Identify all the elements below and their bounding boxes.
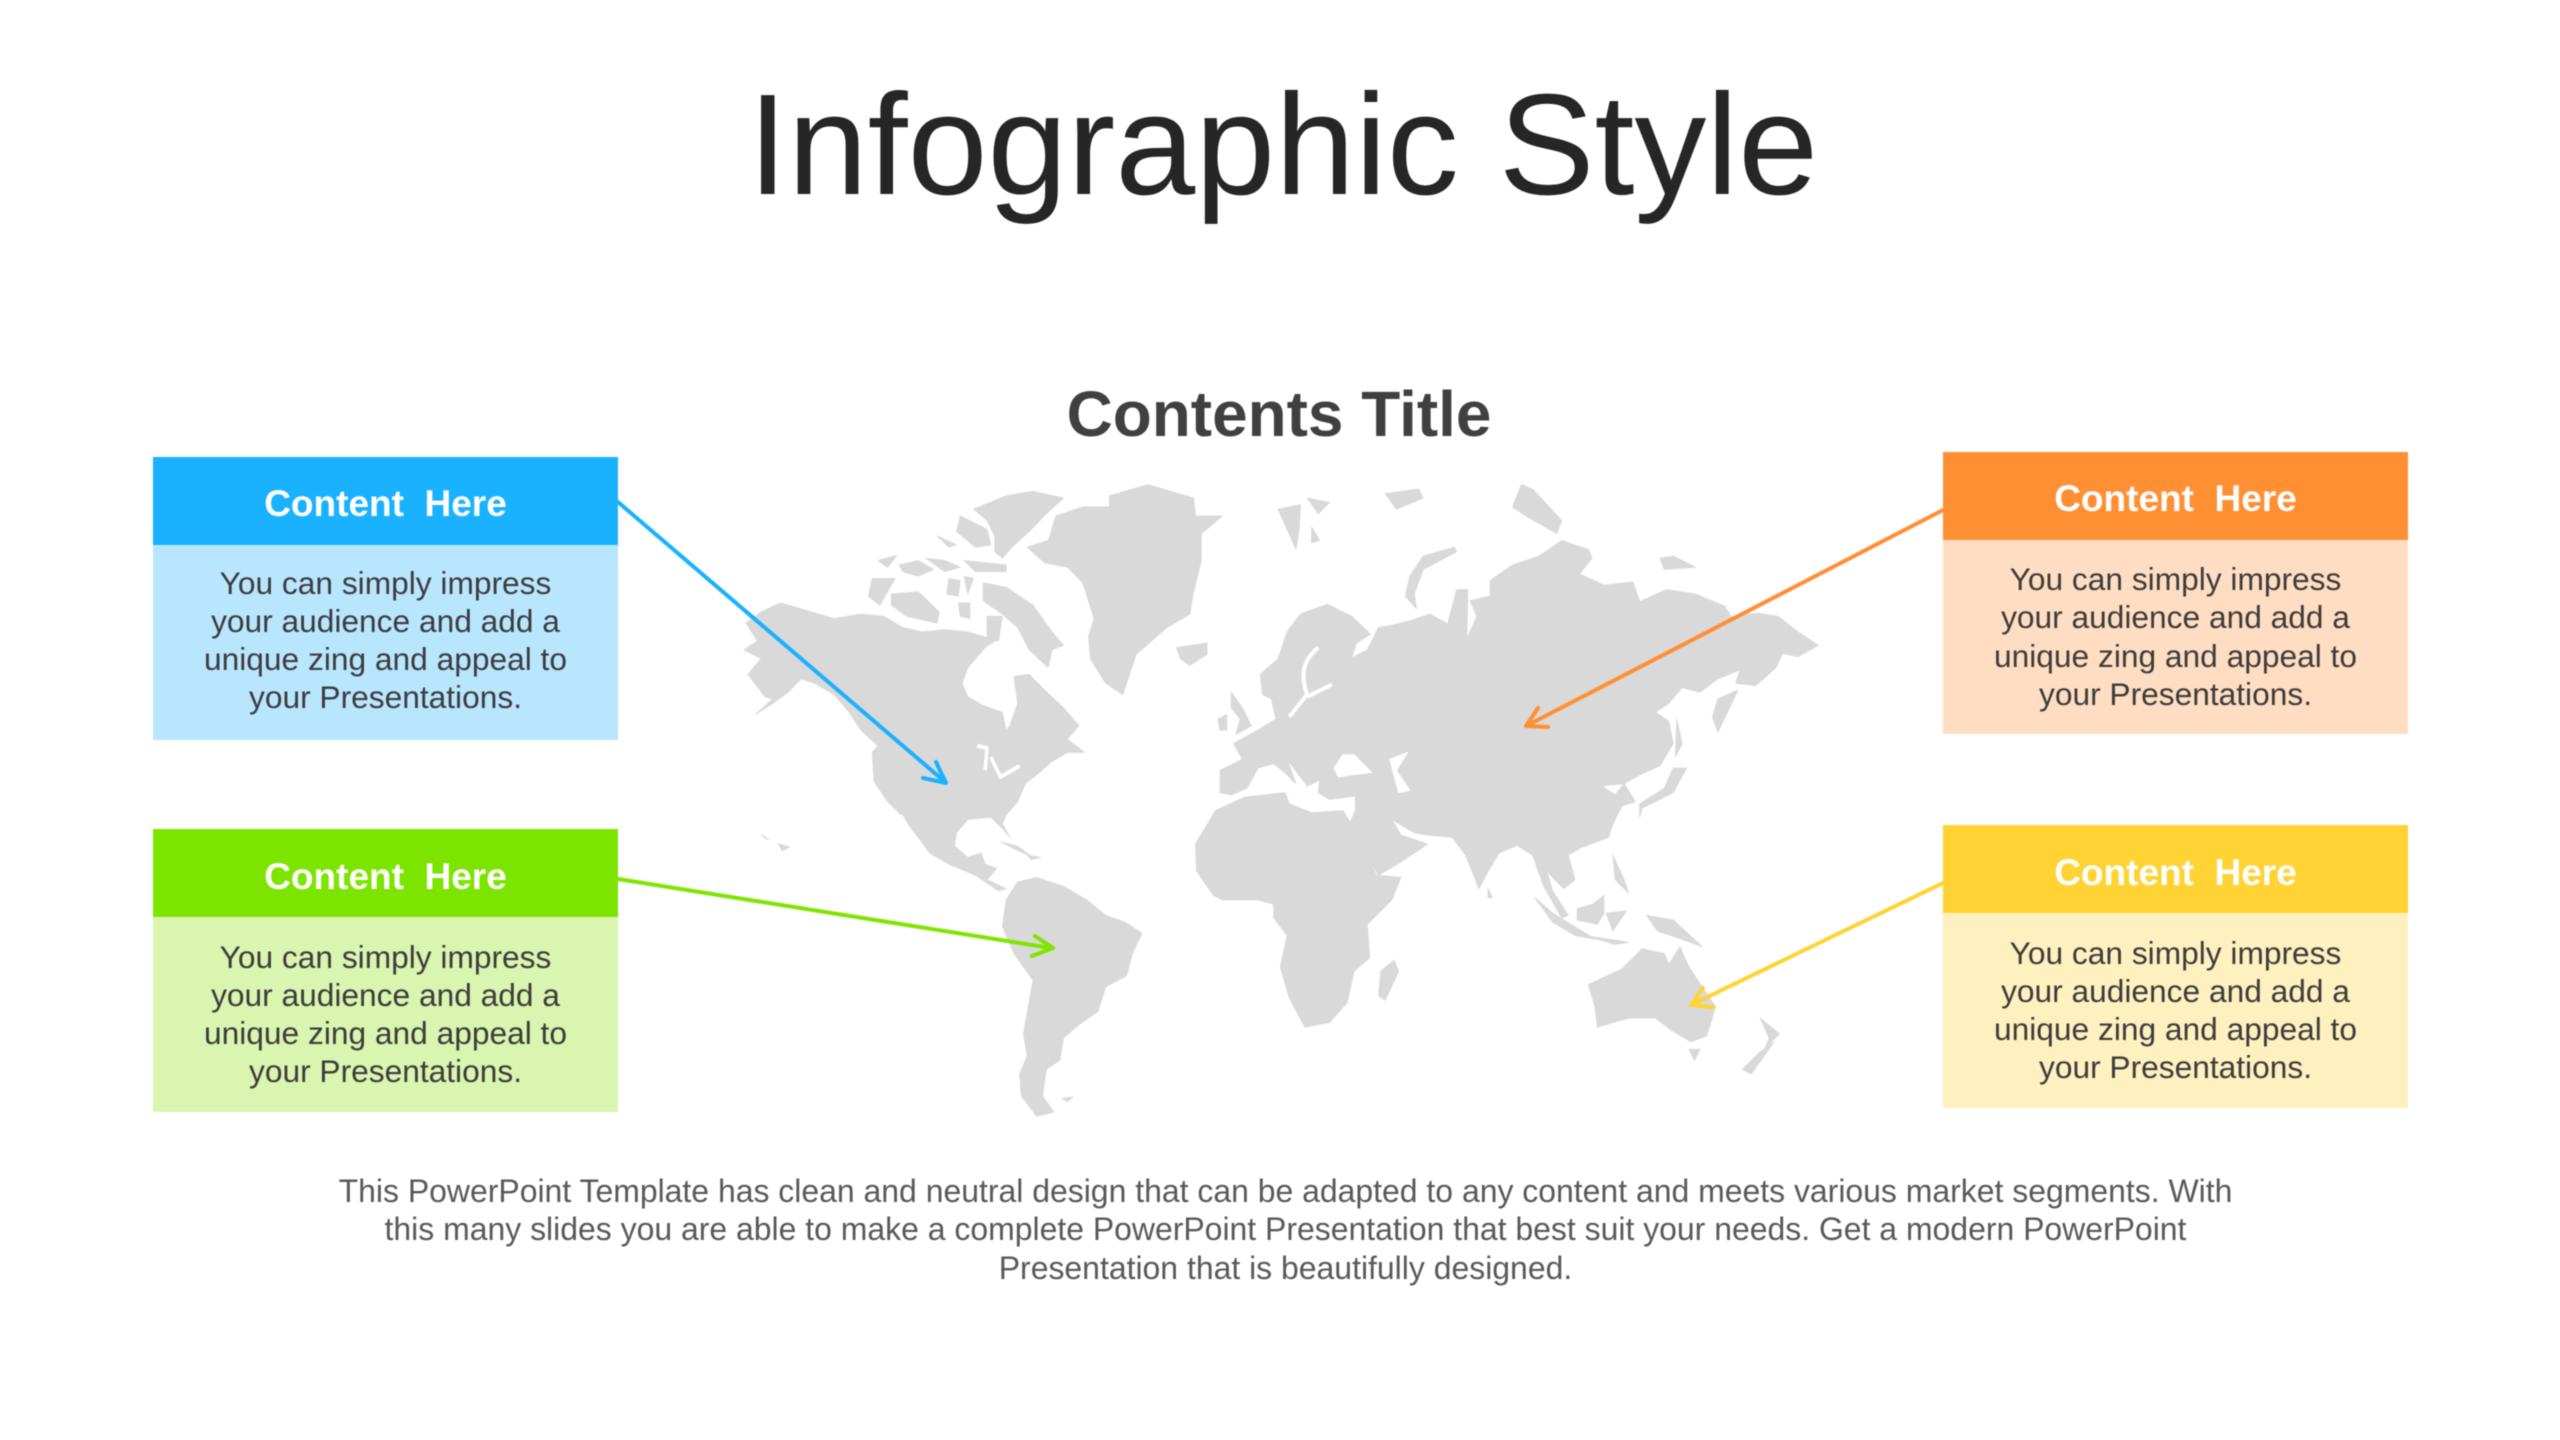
panel heading: green: Content Here xyxy=(264,856,507,896)
panel heading: green xyxy=(153,829,618,917)
panel text: blue: You can simply impress your audience and add a unique zing and appeal to your Presentations. xyxy=(204,564,567,715)
panel: green content box xyxy=(153,829,618,1112)
panel: blue content box xyxy=(153,457,618,740)
panel: orange content box xyxy=(1943,452,2408,734)
title: Infographic Style xyxy=(748,65,1818,225)
footer description text: This PowerPoint Template has clean and neutral design that can be adapted to any content and meets various market segments. With this many slides you are able to make a complete PowerPoint Presentation that best suit your needs. Get a modern PowerPoint Presentation that is beautifully designed. xyxy=(339,1173,2232,1286)
panel: yellow content box xyxy=(1943,825,2408,1108)
subtitle: contents title: Contents Title xyxy=(1067,378,1491,450)
panel text: yellow: You can simply impress your audience and add a unique zing and appeal to your Presentations. xyxy=(1994,934,2357,1085)
panel heading: yellow: Content Here xyxy=(2054,852,2297,892)
panel heading: yellow xyxy=(1943,825,2408,913)
panel heading: blue: Content Here xyxy=(264,483,507,524)
panel heading: orange: Content Here xyxy=(2054,478,2297,518)
panel text: green: You can simply impress your audience and add a unique zing and appeal to your Presentations. xyxy=(204,938,567,1089)
panel heading: orange xyxy=(1943,452,2408,540)
panel text: orange: You can simply impress your audience and add a unique zing and appeal to your Presentations. xyxy=(1994,561,2357,712)
panel heading: blue xyxy=(153,457,618,545)
